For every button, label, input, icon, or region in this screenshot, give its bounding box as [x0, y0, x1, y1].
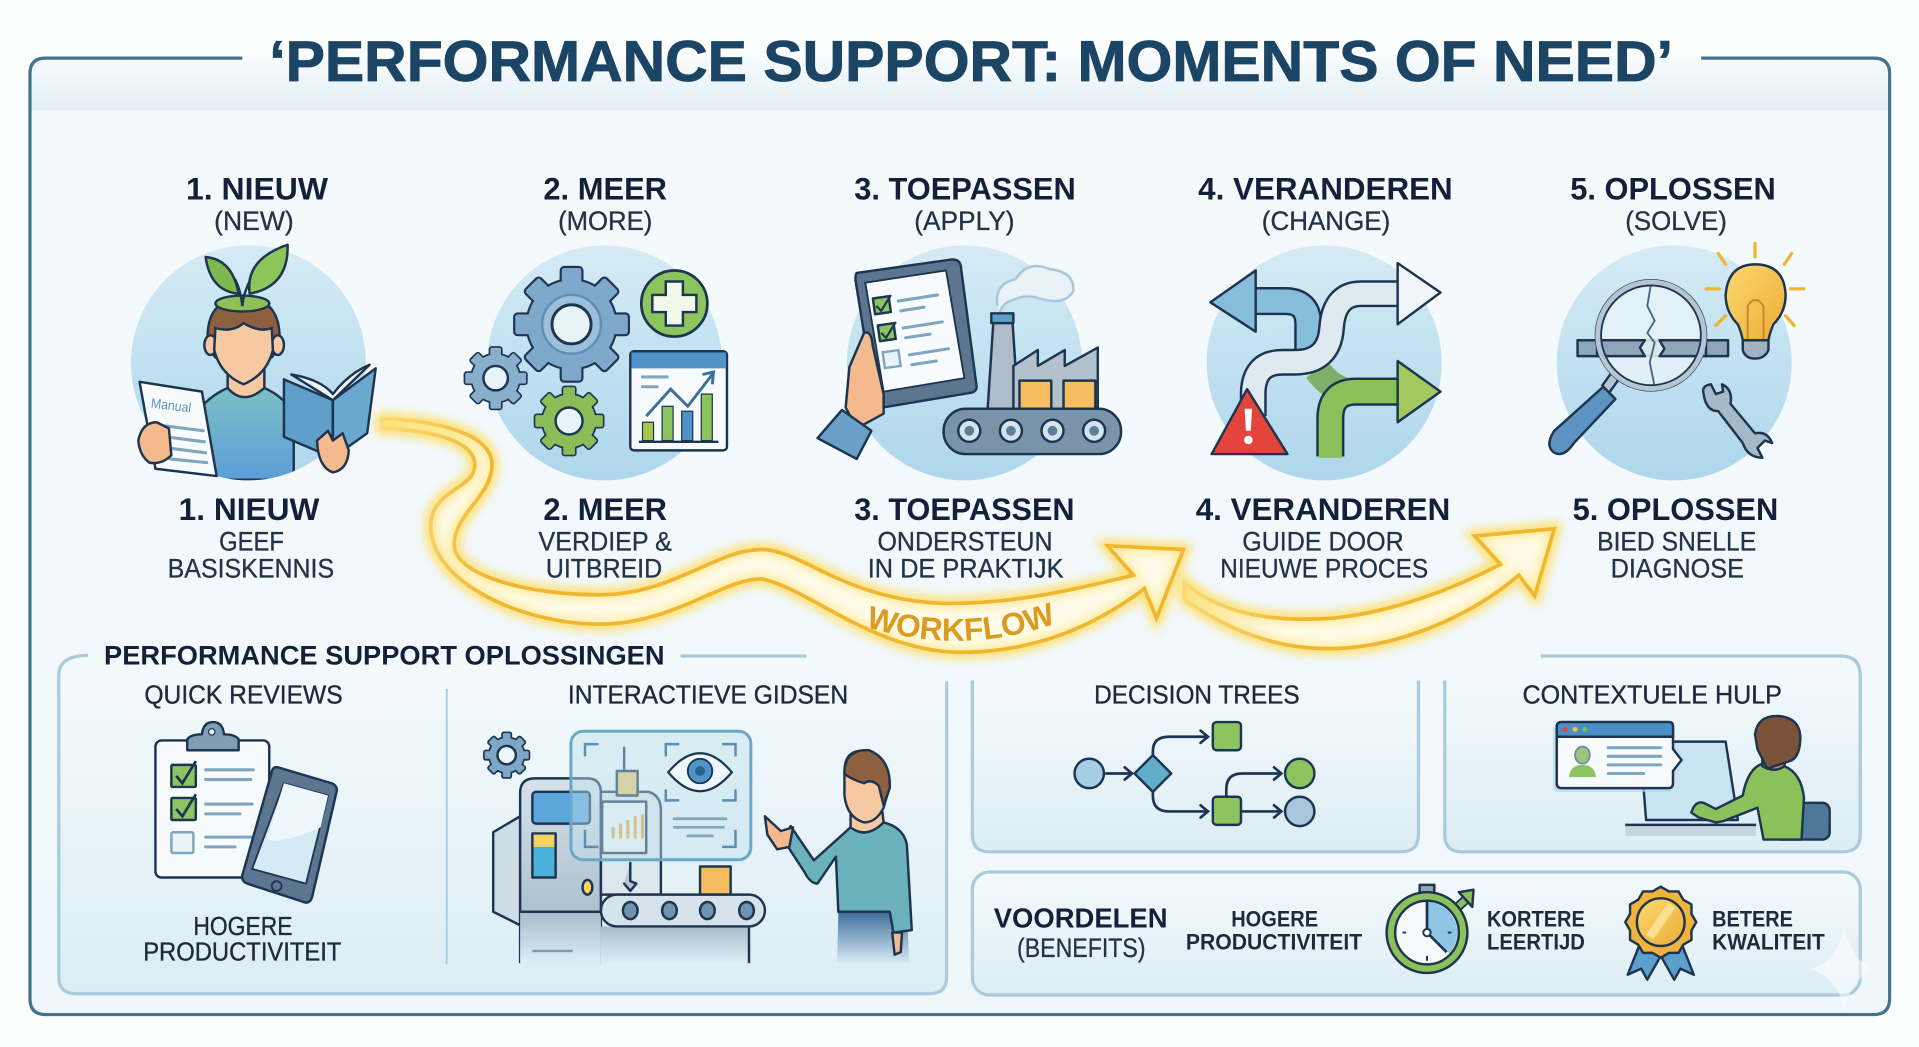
- panel: decision trees: [972, 680, 1418, 852]
- workflow label: WORKFLOW: [870, 602, 1052, 641]
- caption: hogere productiviteit: HOGERE: [193, 913, 293, 941]
- illustration: machine with conveyor: [493, 748, 765, 963]
- description: guide door nieuwe proces: GUIDE DOOR: [1242, 527, 1404, 557]
- description: bied snelle diagnose: BIED SNELLE: [1597, 527, 1756, 557]
- icon: decision tree flowchart: [1075, 722, 1314, 826]
- benefit: hogere productiviteit: PRODUCTIVITEIT: [1186, 930, 1363, 955]
- heading: 3 toepassen: 3. TOEPASSEN: [854, 170, 1076, 206]
- description: guide door nieuwe proces: NIEUWE PROCES: [1220, 554, 1428, 584]
- description: bied snelle diagnose: [1597, 527, 1756, 584]
- description: bied snelle diagnose: DIAGNOSE: [1611, 554, 1744, 584]
- description: guide door nieuwe proces: [1220, 527, 1428, 584]
- benefit: kortere leertijd: LEERTIJD: [1487, 930, 1585, 955]
- benefit: kortere leertijd: KORTERE: [1487, 906, 1585, 931]
- icon: clipboard and phone: [155, 722, 337, 903]
- heading: 4 veranderen: 4. VERANDEREN: [1198, 170, 1453, 206]
- column 2: meer: [465, 170, 727, 584]
- icon: medal: [1625, 887, 1696, 980]
- description: geef basiskennis: [168, 527, 334, 584]
- benefit: kortere leertijd: [1487, 906, 1585, 955]
- workflow ribbon: [369, 406, 1568, 666]
- subheading: solve: (SOLVE): [1625, 206, 1727, 236]
- label: 3 toepassen: 3. TOEPASSEN: [854, 491, 1075, 527]
- heading: quick reviews: QUICK REVIEWS: [144, 682, 343, 710]
- title: ‘PERFORMANCE SUPPORT: MOMENTS OF NEED’: [269, 30, 1673, 94]
- icon: branching arrows with warning sign: [1207, 245, 1442, 480]
- panel: performance support oplossingen: [59, 641, 947, 994]
- description: verdiep en uitbreid: VERDIEP &: [538, 527, 672, 557]
- label: 1 nieuw: 1. NIEUW: [179, 491, 319, 527]
- benefit: betere kwaliteit: BETERE: [1712, 906, 1793, 931]
- label: 4 veranderen: 4. VERANDEREN: [1196, 491, 1450, 527]
- panel: voordelen benefits: [972, 872, 1860, 995]
- label: 5 oplossen: 5. OPLOSSEN: [1573, 491, 1778, 527]
- benefit: betere kwaliteit: [1712, 906, 1825, 955]
- icon: holographic eye panel: [571, 731, 751, 860]
- illustration: person pointing: [765, 750, 912, 963]
- icon: learner with plant, manual and book: [131, 245, 376, 480]
- subheading: benefits: (BENEFITS): [1017, 933, 1146, 963]
- icon: gears, plus and chart: [465, 245, 727, 480]
- description: geef basiskennis: BASISKENNIS: [168, 554, 334, 584]
- label: 2 meer: 2. MEER: [543, 491, 667, 527]
- benefit: hogere productiviteit: [1186, 906, 1363, 955]
- heading: voordelen: VOORDELEN: [994, 903, 1168, 934]
- subheading: change: (CHANGE): [1262, 206, 1390, 236]
- icon: person at monitor with help popup: [1553, 716, 1830, 840]
- heading: 5 oplossen: 5. OPLOSSEN: [1570, 170, 1776, 206]
- panel heading: PERFORMANCE SUPPORT OPLOSSINGEN: [104, 641, 665, 671]
- heading: interactieve gidsen: INTERACTIEVE GIDSEN: [568, 682, 848, 710]
- panel: contextuele hulp: [1445, 656, 1860, 852]
- heading: 1 nieuw: 1. NIEUW: [186, 170, 328, 206]
- caption: hogere productiviteit: PRODUCTIVITEIT: [143, 939, 342, 967]
- description: verdiep en uitbreid: [538, 527, 672, 584]
- icon: magnifier, broken pipe, bulb and wrench: [1549, 244, 1804, 480]
- description: ondersteun in de praktijk: ONDERSTEUN: [878, 527, 1053, 557]
- subheading: more: (MORE): [558, 206, 652, 236]
- subheading: new: (NEW): [214, 206, 294, 236]
- icon: tablet and factory: [818, 245, 1121, 480]
- description: geef basiskennis: GEEF: [219, 527, 284, 557]
- description: verdiep en uitbreid: UITBREID: [546, 554, 662, 584]
- column 3: toepassen: [818, 170, 1121, 584]
- subheading: apply: (APPLY): [914, 206, 1015, 236]
- description: ondersteun in de praktijk: IN DE PRAKTIJK: [868, 554, 1064, 584]
- description: ondersteun in de praktijk: [868, 527, 1064, 584]
- benefit: hogere productiviteit: HOGERE: [1231, 906, 1318, 931]
- icon: gear: [485, 733, 529, 777]
- icon: learner with plant, manual and book: Manual: [150, 396, 192, 415]
- column 4: veranderen: [1196, 170, 1453, 584]
- caption: hogere productiviteit: [143, 913, 342, 967]
- heading: decision trees: DECISION TREES: [1094, 682, 1300, 710]
- heading: contextuele hulp: CONTEXTUELE HULP: [1522, 682, 1782, 710]
- icon: sparkle watermark: [1811, 925, 1875, 1011]
- column 5: oplossen: [1549, 170, 1804, 584]
- heading: 2 meer: 2. MEER: [543, 170, 667, 206]
- benefit: betere kwaliteit: KWALITEIT: [1712, 930, 1825, 955]
- column 1: nieuw: [131, 170, 376, 584]
- icon: stopwatch: [1387, 885, 1474, 973]
